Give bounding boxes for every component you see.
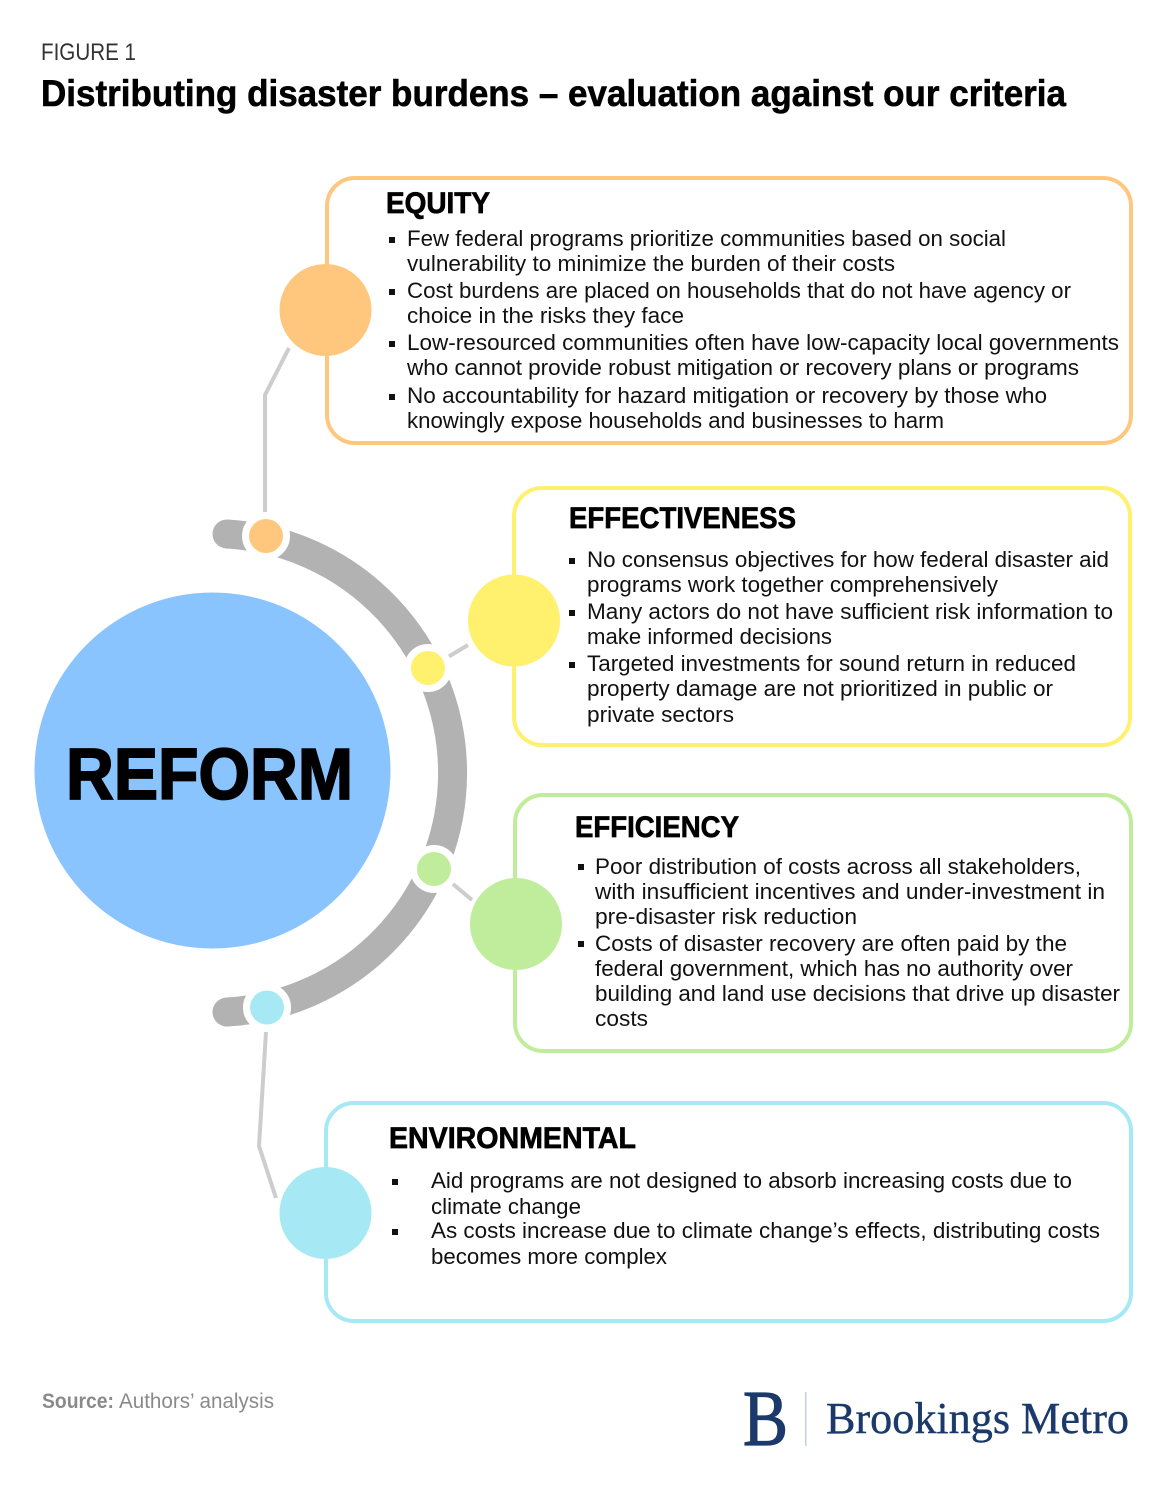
bullets: environmental: becomes more complex [431,1244,667,1269]
bullets: efficiency [578,854,1120,1031]
heading: environmental: ENVIRONMENTAL [389,1122,636,1155]
bullets: environmental: Aid programs are not designed to absorb increasing costs due to [431,1168,1072,1193]
connector: environmental [259,1032,276,1198]
panel: environmental [280,1103,1131,1321]
central circle [34,592,390,948]
bullets: equity [389,226,1119,433]
connector: effectiveness [448,645,468,657]
bullets: efficiency: with insufficient incentives and under-investment in [594,879,1105,904]
bullets: efficiency: Costs of disaster recovery are often paid by the [595,931,1067,956]
source note: Authors’ analysis [119,1390,274,1413]
bullets: efficiency: costs [595,1006,648,1031]
heading: equity: EQUITY [386,187,490,220]
logo: brookings metro: B [743,1376,788,1463]
panel circle: efficiency [470,878,562,970]
bullets: effectiveness: Many actors do not have sufficient risk information to [587,599,1113,624]
bullets: efficiency: pre-disaster risk reduction [595,904,857,929]
connector: equity [265,348,289,513]
bullets: equity: No accountability for hazard mitigation or recovery by those who [407,383,1047,408]
bullets: effectiveness: Targeted investments for sound return in reduced [587,651,1076,676]
bullets: equity: choice in the risks they face [407,303,684,328]
node: effectiveness [411,651,445,685]
bullets: effectiveness: property damage are not prioritized in public or [587,676,1053,701]
bullets: equity: vulnerability to minimize the burden of their costs [407,251,895,276]
bullets: efficiency: federal government, which has no authority over [595,956,1073,981]
bullets: effectiveness: make informed decisions [587,624,832,649]
bullets: effectiveness: private sectors [587,702,734,727]
bullets: equity: knowingly expose households and businesses to harm [407,408,944,433]
panel: efficiency [470,795,1131,1051]
panel: effectiveness [468,488,1130,745]
bullets: equity: Low-resourced communities often have low-capacity local governments [407,330,1119,355]
bullets: environmental: As costs increase due to climate change’s effects, distributing costs [431,1218,1100,1243]
bullets: effectiveness: No consensus objectives for how federal disaster aid [587,547,1109,572]
bullets: environmental [392,1168,1100,1269]
logo: brookings metro: Brookings Metro [826,1394,1129,1443]
bullets: effectiveness [569,547,1113,727]
bullets: environmental: climate change [431,1194,581,1219]
bullets: efficiency: building and land use decisions that drive up disaster [595,981,1120,1006]
title: Distributing disaster burdens – evaluation against our criteria [41,73,1066,114]
panel circle: effectiveness [468,574,560,666]
central label: reform: REFORM [66,735,353,815]
source note [42,1390,274,1413]
bullets: equity: Few federal programs prioritize communities based on social [407,226,1006,251]
panel circle: equity [280,264,372,356]
panel: equity [280,178,1131,443]
bullets: equity: Cost burdens are placed on households that do not have agency or [407,278,1071,303]
bullets: effectiveness: programs work together comprehensively [587,572,998,597]
node: environmental [250,990,284,1024]
bullets: efficiency: Poor distribution of costs across all stakeholders, [595,854,1081,879]
connector: efficiency [453,884,472,900]
grey arc [227,534,453,1012]
node: equity [249,519,283,553]
source note: Source: [42,1390,114,1413]
figure label: FIGURE 1 [41,39,136,66]
bullets: equity: who cannot provide robust mitigation or recovery plans or programs [406,355,1079,380]
heading: effectiveness: EFFECTIVENESS [569,502,796,535]
heading: efficiency: EFFICIENCY [575,811,739,844]
logo: brookings metro [743,1376,1129,1463]
node: efficiency [417,852,451,886]
panel circle: environmental [280,1167,372,1259]
